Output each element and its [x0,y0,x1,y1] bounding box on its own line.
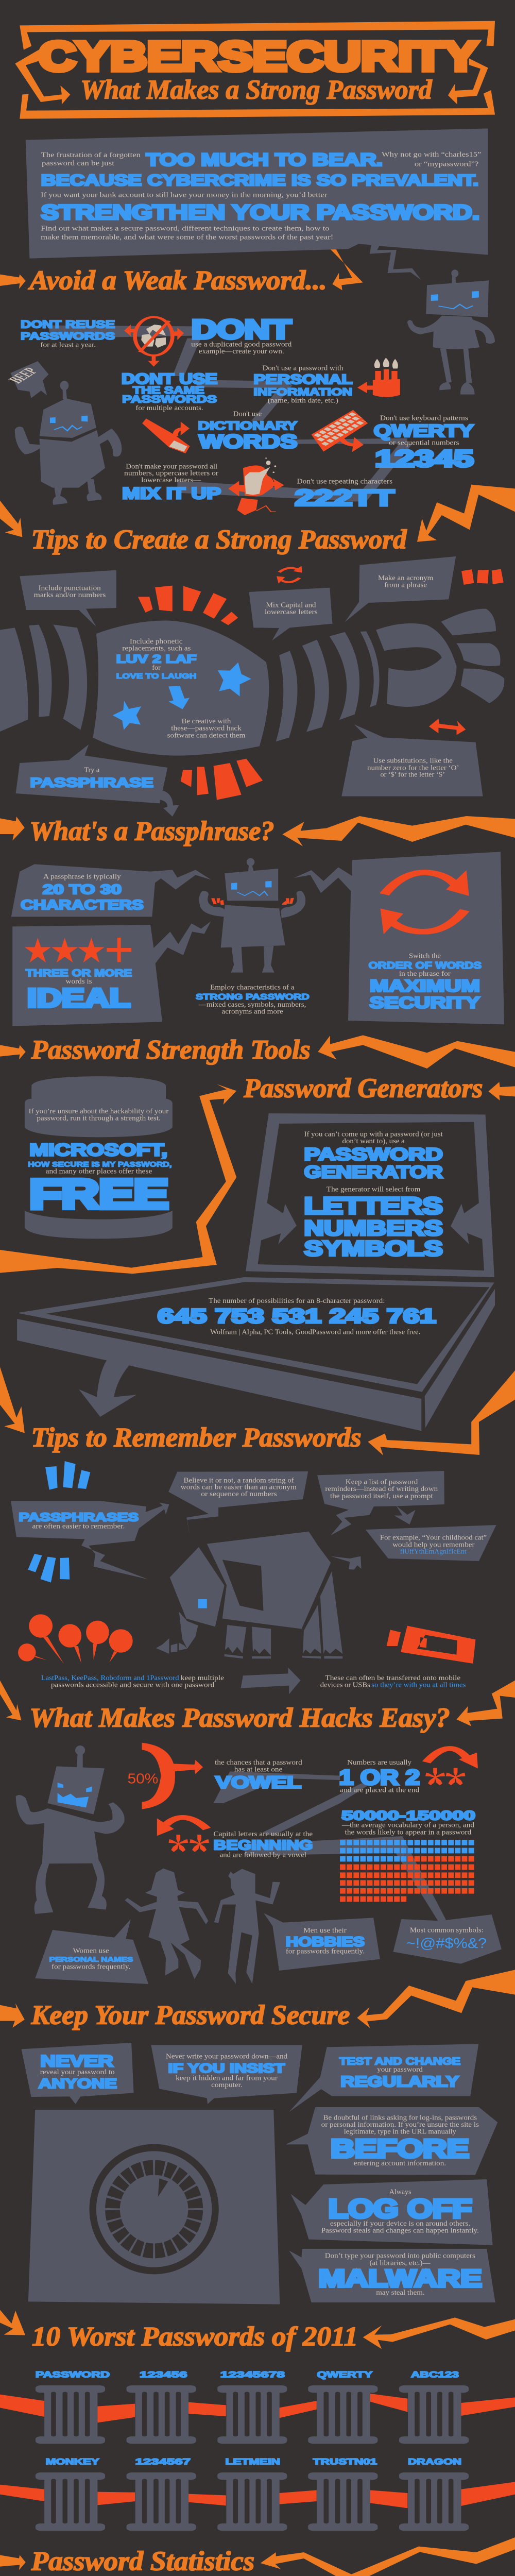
text: personal information: PERSONAL [253,371,352,387]
illustration: laptop keyboard deck [17,1277,495,1431]
icon: red burst top [138,586,238,625]
callout: reminders list: reminders—instead of writing down [325,1485,438,1493]
text: intro copy: make them memorable, and what were some of the worst passwords of the past year! [41,233,333,241]
text: be creative: Be creative with [182,718,231,725]
icon: keyboard [312,410,368,452]
callout: malware [289,2249,495,2302]
text: possibilities: 645 753 531 245 761 [158,1305,436,1327]
callout: women use personal names [35,1919,148,1984]
text: strong password characteristics: —mixed cases, symbols, numbers, [198,1001,306,1008]
illustration: laptop screen [246,1113,494,1277]
callout: men use hobbies: HOBBIES [286,1935,365,1949]
section: strength tools and generators [0,1034,515,1431]
panel: order of words: in the phrase for [399,970,451,977]
labels: row one passwords: QWERTY [317,2370,372,2379]
callout: beep: BEEP [5,365,42,385]
text: personal information: Don't use a password with [263,365,343,372]
callout: women use personal names: PERSONAL NAMES [49,1956,133,1963]
callout: substitutions [341,724,483,796]
labels: row one passwords: 123456 [140,2370,187,2379]
icons: columns row one [36,2385,469,2444]
ribbon: row one [0,2394,515,2422]
callout: passphrase [16,744,179,817]
text: capital letters [214,1831,313,1859]
text: keyboard patterns: 12345 [375,445,474,471]
icon: birthday cake [357,358,400,397]
arrow: right of heading [368,1370,515,1455]
text: dictionary words: WORDS [199,431,297,452]
arrow: left of heading [0,2310,25,2335]
callout: never reveal: NEVER [40,2052,113,2070]
icon: angry robot [16,1745,125,1914]
text: numbers 1 or 2: 1 OR 2 [339,1766,420,1789]
icon: robot left [15,381,122,505]
callout: common symbols [393,1914,502,1964]
callout: random words: or sequence of numbers [201,1490,277,1498]
arrow: right of hacks heading [456,1681,515,1726]
labels: row two passwords: TRUSTN01 [313,2457,377,2466]
callout: log off: Always [389,2189,411,2196]
callout: random words [168,1471,308,1537]
panel: order of words [294,852,504,1024]
icon: blue ticks top [45,1461,90,1490]
heading: password statistics: Password Statistics [31,2546,254,2576]
arrow: zigzag right of heading [282,816,515,846]
arrow: to tips heading [0,501,22,537]
callout: never reveal: reveal your password to [40,2069,115,2076]
callout: reminders list: the password itself, use a prompt [330,1493,433,1500]
callout: passphrases: PASSPHRASES [19,1511,139,1524]
text: mix it up: numbers, uppercase letters or [124,470,218,477]
labels: row one passwords: PASSWORD [36,2370,110,2379]
text: don't duplicate: DONT [192,314,291,344]
text: repeating characters [295,478,394,511]
text: vowel: has at least one [234,1766,282,1773]
section: avoid a weak password [0,265,515,542]
callout: never write down: computer. [211,2081,243,2089]
text: intro copy: If you want your bank account to still have your money in the morning, you’d better [41,192,327,199]
callout: beep [5,361,48,398]
text: capital letters: BEGINNING [214,1837,313,1853]
arrow: zigzag right of statistics heading [261,2537,515,2576]
arrow: left of heading [0,1045,26,1060]
icon: blue star left [113,701,141,730]
callout: random words: words can be easier than an acronym [181,1484,297,1491]
illustration: safe [28,2110,280,2304]
section: tips to create a strong password [0,524,504,817]
section: 10 worst passwords of 2011 [0,2310,515,2576]
text: strong password characteristics: STRONG PASSWORD [196,992,310,1001]
text: strength tools copy: FREE [29,1171,168,1217]
text: be creative [167,718,246,739]
icon: robot flexing [199,858,305,973]
illustration: woman [125,1869,208,1979]
panel: three or more words: THREE OR MORE [26,968,132,979]
callout: log off [290,2179,493,2245]
text: phonetic replacements: LOVE TO LAUGH [116,672,196,680]
icon: blue star right [218,663,251,697]
text: don't reuse: for at least a year. [40,341,96,349]
callout: never write down: keep it hidden and far from your [176,2074,278,2082]
arrow: red double [429,719,466,735]
callout: capitals: lowercase letters [265,608,318,616]
text: mix it up: lowercase letters— [141,477,201,484]
labels: row two passwords: 1234567 [135,2457,191,2466]
text: don't duplicate [191,314,291,355]
text: vowel: the chances that a password [215,1759,302,1766]
text: don't duplicate: use a duplicated good password [191,341,291,348]
text: mix it up: Don't make your password all [126,463,217,470]
section: title and intro [15,21,495,290]
chart: 50 percent half ring [127,1743,203,1809]
icon: red burst bottom [181,759,263,800]
text: generators copy: don’t want to), use a [342,1138,405,1145]
callout: acronym: Make an acronym [378,574,433,582]
text: numbers 1 or 2: Numbers are usually [347,1759,412,1766]
connector band [49,326,412,501]
ribbon: row two [0,2482,515,2508]
text: generators copy: SYMBOLS [304,1237,443,1260]
panel: three or more words: IDEAL [27,984,130,1013]
text: personal information: INFORMATION [253,385,352,398]
text: keyboard patterns [374,415,474,471]
icon: refresh arrows [277,566,302,584]
text: intro copy: Find out what makes a secure password, different techniques to create them, how to [41,225,330,232]
arrow: left of heading [0,817,25,841]
panel: three or more words: words is [66,978,92,985]
text: phonetic replacements: LUV 2 LAF [116,653,196,666]
icon: jar [25,1076,173,1239]
text: mix it up: MIX IT UP [122,484,221,502]
text: transfer to mobile: devices or USBs [320,1682,370,1689]
text: dictionary words [198,411,297,452]
arrow: left of heading [0,1367,25,1433]
text: intro copy [41,150,481,241]
text: generators copy: GENERATOR [304,1162,443,1181]
labels: row two passwords [46,2457,461,2466]
callout: capitals: Mix Capital and [266,601,316,609]
text: dictionary words: Don't use [233,411,262,418]
heading: What's a Passphrase? [29,816,274,846]
labels: row two passwords: DRAGON [408,2457,461,2466]
arrow: blue [168,686,190,709]
text: vocabulary [341,1808,475,1836]
callout: women use personal names: for passwords frequently. [52,1963,130,1971]
icons: columns row two [36,2472,469,2531]
callout: reminders list: Keep a list of password [346,1479,418,1486]
text: possibilities: The number of possibilities for an 8-character password: [209,1297,385,1304]
text: generators copy: The generator will select from [327,1186,420,1193]
section: hacks details [0,1745,515,2030]
icon: robot right [407,269,495,395]
arrow: intro to avoid heading [329,247,363,290]
text: don't reuse: PASSWORDS [21,330,115,342]
text: don't reuse: DONT REUSE [21,318,115,330]
arrow: zigzag right of heading [318,1035,515,1069]
text: generators copy: NUMBERS [304,1216,443,1240]
text: strength tools copy [28,1108,172,1217]
callout: substitutions: Use substitutions, like the [373,757,453,765]
arrow: grey [241,1668,301,1694]
section: tips to remember passwords [0,1367,515,1580]
text: repeating characters: 222TT [295,485,394,511]
section: password managers [0,1532,515,1809]
callout: example prompt [366,1525,496,1561]
text: strength tools copy: password, run it through a strength test. [37,1115,161,1122]
callout: punctuation: Include punctuation [39,585,101,592]
callout: men use hobbies: for passwords frequently. [286,1948,365,1955]
text: possibilities [158,1297,436,1336]
text: personal information [253,365,352,404]
labels: row two passwords: LETMEIN [226,2457,280,2466]
connector band [214,1771,371,1803]
text: capital letters: Capital letters are usually at the [214,1831,313,1838]
panel: 20 to 30 characters: CHARACTERS [21,897,144,912]
text: numbers 1 or 2 [339,1759,420,1794]
arrow: left of keep secure heading [0,2003,25,2028]
illustration: lobster [0,609,504,756]
text: strong password characteristics: Employ characteristics of a [210,984,294,991]
text: phonetic replacements [116,638,196,680]
text: generators copy: LETTERS [304,1193,443,1219]
panel: order of words: Switch the [409,952,441,960]
text: same passwords: for multiple accounts. [135,404,203,412]
callout: random words: Believe it or not, a random string of [184,1477,294,1484]
text: intro copy: password can be just [42,160,114,167]
text: strength tools copy: HOW SECURE IS MY PASSWORD, [28,1161,172,1168]
callout: test and change: your password [377,2066,423,2073]
callout: punctuation: marks and/or numbers [34,591,106,599]
panel: intro [26,128,488,280]
callout: never write down: IF YOU INSIST [168,2061,285,2076]
text: phonetic replacements: for [152,664,161,671]
text: strength tools copy: and many other places offer these [46,1168,152,1175]
text: password managers: passwords accessible and secure with one password [51,1682,214,1689]
callout: passphrases: are often easier to remember. [32,1523,125,1530]
text: dictionary words: DICTIONARY [198,419,297,432]
text: password managers [41,1674,224,1689]
arrow: zigzag right of heading [363,2317,515,2349]
text: don't reuse [21,318,115,349]
text: intro copy: The frustration of a forgotten [41,151,141,159]
panel: 20 to 30 characters: A passphrase is typically [43,873,121,880]
labels: row one passwords: 12345678 [220,2370,285,2379]
text: phonetic replacements: Include phonetic [130,638,183,645]
text: strong password characteristics [196,984,310,1015]
callout: substitutions: or ‘$’ for the letter ‘S’ [381,771,445,778]
text: same passwords [122,371,217,412]
icon: red ticks [461,569,504,585]
text: transfer to mobile [320,1674,466,1689]
callout: before [286,2107,497,2175]
arrow: left of statistics heading [0,2555,26,2570]
text: vowel: VOWEL [215,1773,301,1792]
callout: men use hobbies [264,1913,380,1971]
text: password managers: keep multiple [181,1674,224,1682]
callout: malware: may steal them. [376,2289,425,2296]
callout: test and change: REGULARLY [340,2073,459,2090]
panel: three or more words [12,921,211,1026]
callout: never reveal [21,2043,134,2104]
text: same passwords: PASSWORDS [122,393,217,405]
icon: balloons [18,1614,133,1664]
text: strength tools copy: MICROSOFT, [29,1140,167,1159]
callout: test and change [289,2044,478,2112]
text: mix it up [122,463,221,502]
section: what's a passphrase [0,816,515,1026]
text: same passwords: THE SAME [133,384,204,396]
text: numbers 1 or 2: and are placed at the end [340,1786,419,1794]
text: generators copy [304,1131,443,1260]
callout: never write down: Never write your password down—and [166,2053,287,2060]
text: repeating characters: Don't use repeating characters [297,478,392,485]
illustration: man [214,1869,280,1984]
panel: 20 to 30 characters [11,864,211,917]
text: intro copy: TOO MUCH TO BEAR. [146,150,383,170]
callout: never reveal: ANYONE [39,2076,117,2091]
callout: punctuation [20,570,116,627]
text: phonetic replacements: replacements, such as [122,645,191,652]
arrow: to password generators [0,1084,236,1274]
arrow: right of generators heading [488,1082,515,1100]
callout: malware: (at libraries, etc.)— [369,2260,431,2267]
panel: 20 to 30 characters: 20 TO 30 [43,882,122,897]
callout: capitals [249,588,332,640]
arrow: left of heading [0,274,26,289]
arrow: zigzag right of keep secure heading [357,1970,515,2028]
arrow: right of tips heading [417,485,515,542]
title frame [15,21,495,119]
text: keyboard patterns: QWERTY [374,421,474,440]
chart: 50 percent half ring: 50% [127,1771,158,1787]
callout: passphrase: Try a [84,766,99,774]
callout: before: entering account information. [354,2160,446,2167]
connector band [245,1803,446,1922]
chart: vocabulary grid [340,1842,475,1899]
callout: men use hobbies: Men use their [303,1927,347,1934]
text: password managers: LastPass, KeePass, Roboform and 1Password [41,1674,179,1682]
callout: acronym [345,556,456,622]
illustration: elephant [156,1532,362,1658]
text: be creative: these—password hack [171,725,242,732]
text: intro copy: or “mypassword”? [415,161,478,168]
text: generators copy: PASSWORD [304,1144,443,1164]
text: same passwords: DONT USE [122,371,217,387]
callout: acronym: from a phrase [384,581,427,589]
labels: row one passwords: ABC123 [411,2370,459,2379]
icon: usb drive [387,1626,475,1664]
labels: row one passwords [36,2370,459,2379]
callout: never write down [151,2045,302,2104]
callout: passphrases [11,1501,169,1580]
icon: blue ticks [28,1554,70,1583]
text: vocabulary: 50000-150000 [341,1808,475,1823]
icon: two asterisks with arrow [425,1749,478,1785]
callout: passphrase: PASSPHRASE [30,775,153,790]
callout: women use personal names: Women use [73,1947,109,1955]
text: personal information: (name, birth date, etc.) [268,397,338,404]
text: be creative: software can detect them [167,732,246,739]
text: don't duplicate: example—create your own. [199,348,284,355]
text: strength tools copy: If you’re unsure about the hackability of your [28,1108,168,1115]
arrow: left of hacks heading [0,1681,21,1720]
callout: reminders list [317,1471,444,1535]
text: capital letters: and are followed by a vowel [220,1851,306,1859]
icon: asterisks with arrow [157,1818,209,1852]
icon: dictionary book [142,418,190,453]
labels: row two passwords: MONKEY [46,2457,99,2466]
text: keyboard patterns: or sequential numbers [389,439,459,447]
section: keep your password secure [21,2043,497,2304]
text: vowel [215,1759,302,1792]
icon: no recycling [124,317,184,367]
text: strong password characteristics: acronyms and more [221,1008,283,1015]
icon: cocktail shaker [228,457,284,515]
